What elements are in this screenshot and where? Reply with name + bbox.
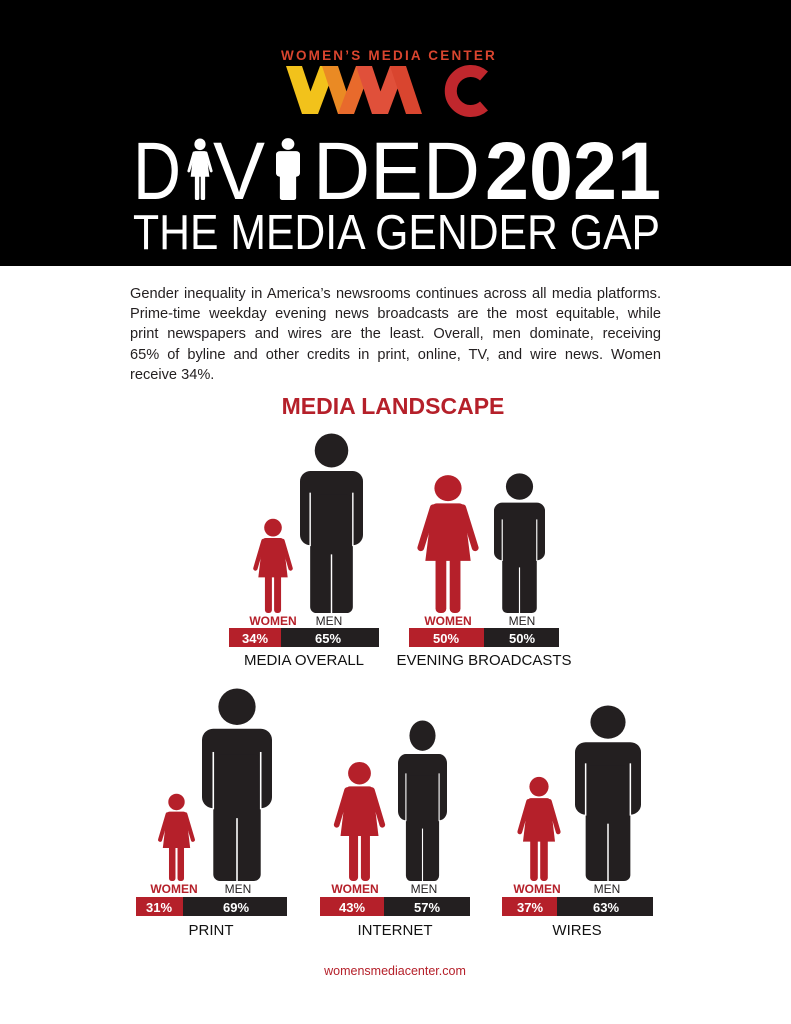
panel: internet: WOMEN: [331, 882, 379, 896]
panel: media overall: MEN: [316, 614, 342, 628]
panel: wires: MEN: [594, 882, 620, 896]
panel: evening broadcasts: 50%: [433, 631, 459, 646]
intro paragraph: Gender inequality in America’s newsrooms continues across all media platforms.: [130, 286, 661, 302]
panel: wires: 63%: [593, 900, 619, 915]
header band: [0, 0, 791, 266]
heading: media landscape: MEDIA LANDSCAPE: [282, 393, 504, 419]
panel: internet: 57%: [414, 900, 440, 915]
panel: evening broadcasts: [396, 473, 572, 669]
panel: print: WOMEN: [150, 882, 198, 896]
title: DIVIDED 2021: DED: [313, 126, 480, 217]
panel: evening broadcasts: MEN: [509, 614, 535, 628]
panel: internet: MEN: [411, 882, 437, 896]
panel: evening broadcasts: EVENING BROADCASTS: [396, 652, 572, 669]
logo: Women's Media Center: [281, 48, 497, 114]
intro paragraph: 65% of byline and other credits in print, online, TV, and wire news. Women: [130, 347, 661, 363]
logo: Women's Media Center: WOMEN’S MEDIA CENTER: [281, 48, 497, 63]
panel: print: PRINT: [188, 922, 234, 939]
panel: print: MEN: [225, 882, 251, 896]
panel: media overall: 34%: [242, 631, 268, 646]
panel: media overall: MEDIA OVERALL: [244, 652, 364, 669]
panel: internet: 43%: [339, 900, 365, 915]
subtitle: THE MEDIA GENDER GAP: [133, 206, 660, 260]
panel: print: [136, 689, 287, 939]
panel: print: 69%: [223, 900, 249, 915]
panel: media overall: [229, 434, 379, 669]
panel: internet: INTERNET: [358, 922, 432, 939]
panel: print: 31%: [146, 900, 172, 915]
footer url: womensmediacenter.com: [323, 964, 466, 978]
panel: evening broadcasts: WOMEN: [424, 614, 472, 628]
intro paragraph: receive 34%.: [130, 367, 214, 383]
panel: media overall: 65%: [315, 631, 341, 646]
title: DIVIDED 2021: [133, 126, 661, 217]
panel: wires: WOMEN: [513, 882, 561, 896]
title: DIVIDED 2021: 2021: [485, 126, 661, 217]
panel: media overall: WOMEN: [249, 614, 297, 628]
intro paragraph: Prime-time weekday evening news broadcasts are the most equitable, while: [130, 306, 661, 322]
panel: evening broadcasts: 50%: [509, 631, 535, 646]
intro paragraph: [130, 286, 661, 383]
title: DIVIDED 2021: D: [133, 126, 181, 217]
title: DIVIDED 2021: V: [213, 126, 265, 217]
panel: wires: WIRES: [552, 922, 602, 939]
panel: wires: 37%: [517, 900, 543, 915]
intro paragraph: print newspapers and wires are the least. Overall, men dominate, receiving: [130, 326, 661, 342]
panel: internet: [320, 720, 470, 939]
panel: wires: [502, 706, 653, 939]
